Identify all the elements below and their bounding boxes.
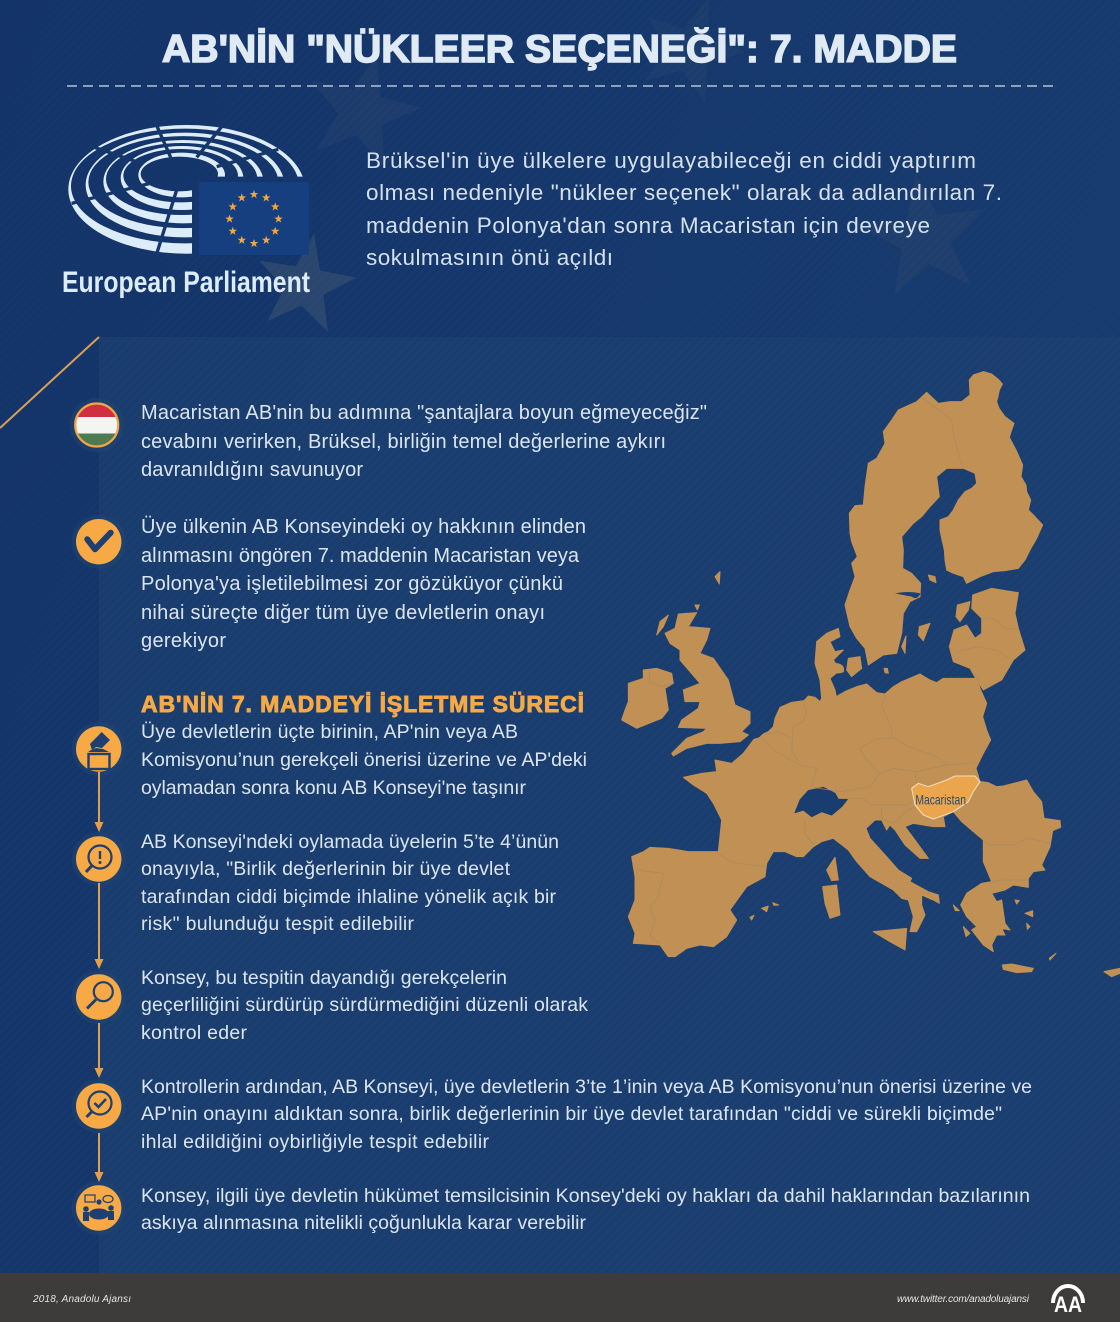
step 3 text [141, 967, 588, 1044]
icon: magnifier with check [76, 1083, 121, 1129]
title: AB'NİN "NÜKLEER SEÇENEĞİ": 7. MADDE [162, 27, 957, 71]
paragraph: Hungary's response: davranıldığını savunuyor [141, 459, 363, 481]
step 1 text: oylamadan sonra konu AB Konseyi'ne taşınır [141, 777, 526, 799]
map: Mediterranean islands [827, 857, 838, 881]
step 4 text: AP'nin onayını aldıktan sonra, birlik değerlerinin bir üye devlet tarafından "ciddi ve sürekli biçimde" [141, 1103, 1002, 1125]
step 1 text: Komisyonu’nun gerekçeli önerisi üzerine ve AP'deki [141, 749, 587, 771]
icon: ballot box [76, 726, 121, 772]
step 5 text [141, 1185, 1030, 1234]
map: continental Europe and islands [622, 613, 1120, 977]
paragraph: Hungary's response: cevabını verirken, Brüksel, birliğin temel değerlerine aykırı [141, 431, 666, 453]
map: Hungary highlight: Macaristan [915, 791, 966, 807]
paragraph: Hungary's response: Macaristan AB'nin bu adımına "şantajlara boyun eğmeyeceğiz" [141, 402, 707, 424]
paragraph: Hungary's response [141, 402, 707, 481]
step 5 text: Konsey, ilgili üye devletin hükümet temsilcisinin Konsey'deki oy hakları da dahil haklarından bazılarının [141, 1185, 1030, 1207]
logo: Anadolu Agency: AA [1054, 1292, 1082, 1317]
arrow 2 [94, 883, 104, 969]
paragraph: voting rights: Üye ülkenin AB Konseyindeki oy hakkının elinden [141, 516, 586, 538]
intro text: sokulmasının önü açıldı [366, 245, 613, 270]
step 2 text: tarafından ciddi biçimde ihlaline yönelik açık bir [141, 886, 556, 908]
arrow 3 [94, 1023, 104, 1078]
section heading: AB'NİN 7. MADDEYİ İŞLETME SÜRECİ [141, 691, 584, 717]
step 2 text: AB Konseyi'ndeki oylamada üyelerin 5’te 4’ünün [141, 831, 559, 853]
step 3 text: kontrol eder [141, 1022, 248, 1044]
lighter content panel [99, 337, 1120, 1273]
map of the EU [622, 372, 1120, 977]
icon: hemicycle [68, 122, 305, 256]
step 1 text: Üye devletlerin üçte birinin, AP'nin veya AB [141, 721, 518, 743]
step 3 text: Konsey, bu tespitin dayandığı gerekçelerin [141, 967, 507, 989]
step 2 text [141, 831, 559, 935]
step 4 text [141, 1076, 1032, 1153]
icon: magnifier with exclamation [76, 836, 121, 882]
step 3 text: geçerliliğini sürdürüp sürdürmediğini düzenli olarak [141, 994, 588, 1016]
step 1 text [141, 721, 587, 799]
intro text: Brüksel'in üye ülkelere uygulayabileceği en ciddi yaptırım [366, 148, 976, 173]
footer [0, 1273, 1120, 1322]
dashed title rule [67, 85, 1053, 87]
step 4 text: Kontrollerin ardından, AB Konseyi, üye devletlerin 3’te 1’inin veya AB Komisyonu’nun önerisi üzerine ve [141, 1076, 1032, 1098]
paragraph: voting rights: nihai süreçte diğer tüm üye devletlerin onayı [141, 602, 545, 624]
logo: European Parliament [62, 122, 310, 299]
icon: meeting [76, 1185, 121, 1231]
map: Nordic and Baltic countries [695, 372, 1043, 690]
step 4 text: ihlal edildiğini oybirliğiyle tespit edebilir [141, 1131, 490, 1153]
icon: check mark [76, 519, 121, 564]
map: Ireland [622, 668, 673, 728]
footer link: www.twitter.com/anadoluajansi [897, 1294, 1030, 1305]
map: United Kingdom [665, 613, 750, 756]
gold diagonal line [0, 337, 99, 428]
map: Hungary highlight [912, 776, 980, 819]
icon: Hungarian flag [74, 402, 120, 450]
map: inner borders [637, 672, 1050, 943]
step 2 text: onayıyla, "Birlik değerlerinin bir üye devlet [141, 858, 511, 880]
intro text: olması nedeniyle "nükleer seçenek" olarak da adlandırılan 7. [366, 180, 1002, 205]
footer credit: 2018, Anadolu Ajansı [32, 1294, 131, 1305]
step 2 text: risk" bulunduğu tespit edilebilir [141, 913, 414, 935]
logo wordmark: European Parliament [62, 266, 310, 299]
paragraph: voting rights: gerekiyor [141, 630, 226, 652]
map: Denmark [815, 628, 843, 698]
map: Switzerland gap [795, 787, 847, 817]
intro text [366, 148, 1002, 270]
icon: EU flag [199, 182, 309, 255]
paragraph: voting rights: alınmasını öngören 7. maddenin Macaristan veya [141, 545, 580, 567]
step 5 text: askıya alınmasına nitelikli çoğunlukla karar verebilir [141, 1212, 586, 1234]
icon: magnifier [76, 974, 121, 1020]
paragraph: voting rights [141, 516, 586, 652]
arrow 4 [94, 1133, 104, 1182]
icon halos [70, 398, 126, 1235]
intro text: maddenin Polonya'dan sonra Macaristan için devreye [366, 213, 930, 238]
arrow 1 [94, 772, 104, 832]
paragraph: voting rights: Polonya'ya işletilebilmesi zor gözüküyor çünkü [141, 573, 563, 595]
